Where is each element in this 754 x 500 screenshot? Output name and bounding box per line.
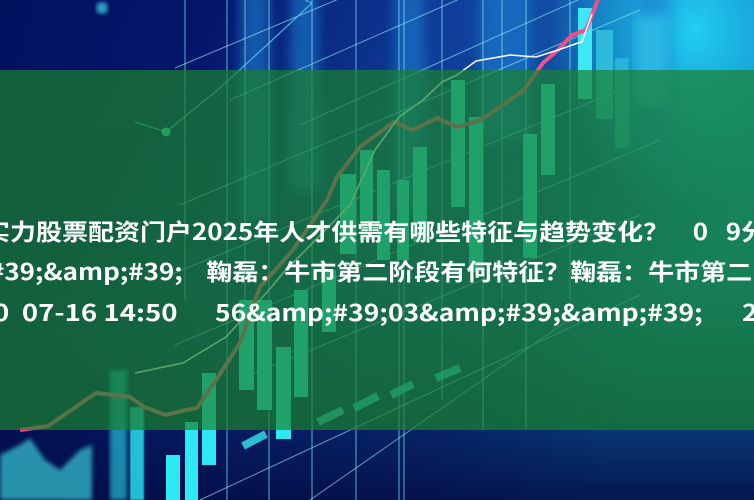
candlestick bars bbox=[110, 8, 668, 500]
title line 2: #39;&amp;#39; 鞠磊：牛市第二阶段有何特征？鞠磊：牛市第二 bbox=[0, 253, 752, 287]
white trend line bbox=[135, 14, 592, 373]
diagonal grid lines bbox=[170, 0, 660, 500]
red trend line bbox=[20, 0, 598, 430]
green translucent band bbox=[0, 70, 754, 430]
blue network line and nodes bbox=[135, 0, 312, 132]
blurred mountain, lower left bbox=[0, 438, 92, 500]
lower dashes bbox=[243, 368, 460, 446]
vertical grid lines bbox=[185, 0, 570, 500]
title line 3 bbox=[0, 294, 754, 328]
title line 3: 56&amp;#39;03&amp;#39;&amp;#39; bbox=[215, 294, 703, 328]
